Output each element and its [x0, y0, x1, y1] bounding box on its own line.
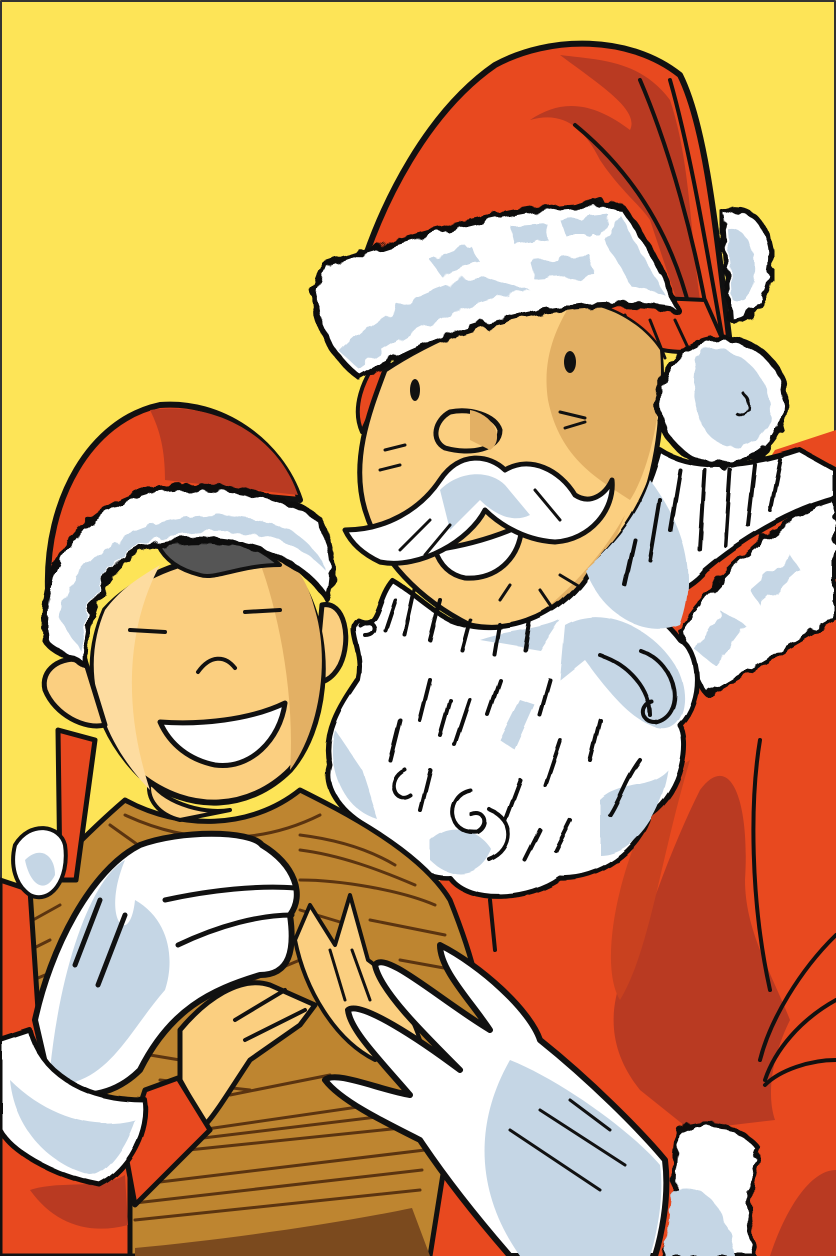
child ear right [315, 605, 346, 682]
child hat [48, 405, 300, 590]
santa beard [328, 570, 697, 896]
child hand lower [180, 983, 315, 1125]
child sleeve [125, 1078, 210, 1205]
child sweater [0, 790, 483, 1256]
santa hat [355, 44, 730, 345]
santa glove right [325, 945, 666, 1256]
santa hat fur brim [314, 204, 678, 378]
child face [93, 535, 323, 803]
santa face [360, 300, 662, 627]
santa cuff left [0, 1030, 146, 1185]
child ear left [44, 659, 105, 726]
child hat fur brim [45, 487, 333, 665]
child hand upper [295, 895, 420, 1060]
santa beard upper sideburn [585, 450, 836, 629]
santa hat pom-pom [658, 338, 786, 466]
child hat tail [13, 730, 95, 897]
santa body [400, 430, 836, 1256]
santa glove left [35, 834, 297, 1095]
santa hat tail puff [722, 210, 772, 321]
santa mustache [345, 458, 612, 563]
santa cuff right [665, 1124, 760, 1256]
child neck [149, 780, 230, 820]
child trousers [135, 1208, 430, 1256]
santa shoulder fur trim [680, 498, 836, 695]
santa mouth [435, 525, 522, 578]
santa hair [358, 295, 725, 432]
santa arm left [0, 880, 130, 1256]
